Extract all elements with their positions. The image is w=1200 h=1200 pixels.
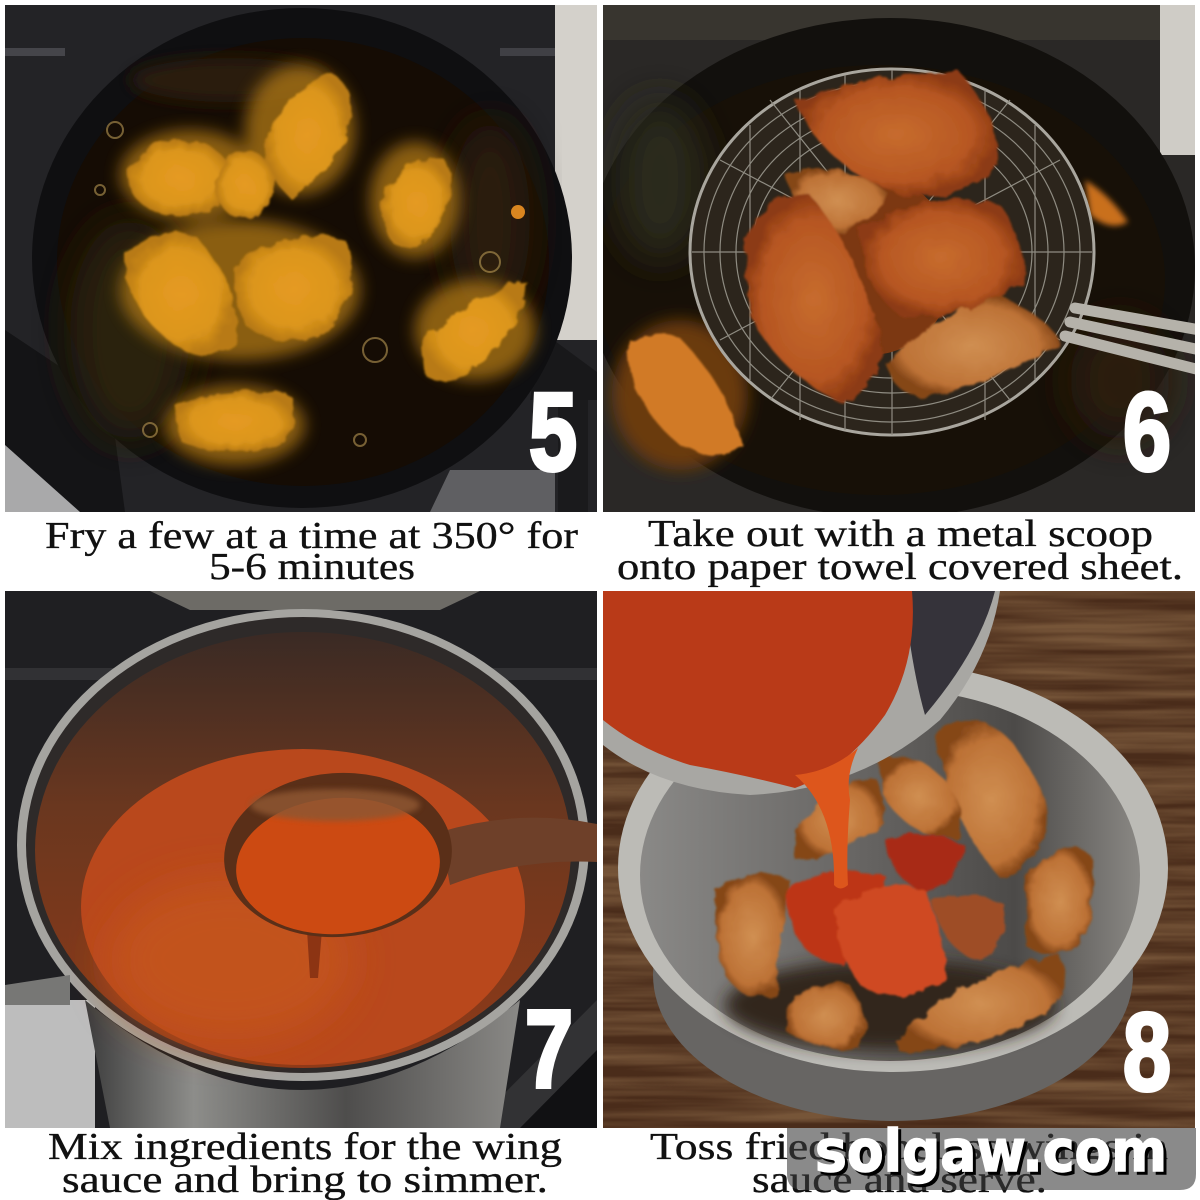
scoop handle [1065, 308, 1200, 370]
caption: step 7: Mix ingredients for the wing [48, 1126, 562, 1168]
steel bowl [653, 968, 1133, 1121]
caption: step 6 [617, 513, 1183, 588]
pot body [85, 1000, 520, 1128]
caption: step 5 [45, 515, 578, 588]
caption: step 8: Toss fried boneless wings in [650, 1126, 1168, 1168]
oil bubbles [95, 122, 500, 446]
wooden spoon [219, 765, 597, 945]
step number 6: 6 [1123, 371, 1171, 494]
pot interior [35, 632, 571, 1068]
sauced wings [785, 834, 965, 996]
watermark bar [787, 1128, 1196, 1190]
skillet with oil [585, 18, 1195, 518]
fried chicken pieces on scoop [745, 72, 1058, 405]
caption: step 6: onto paper towel covered sheet. [617, 546, 1183, 588]
caption: step 7: sauce and bring to simmer. [62, 1159, 548, 1200]
sauce surface [81, 749, 525, 1065]
caption: step 7 [48, 1126, 562, 1200]
watermark text: solgaw.com [815, 1117, 1167, 1185]
caption: step 6: Take out with a metal scoop [648, 513, 1153, 555]
panel: step 8 tossing photo [603, 591, 1195, 1128]
red wing sauce [603, 591, 913, 888]
step number 5: 5 [529, 371, 577, 494]
sauce drip [307, 935, 322, 978]
frying chicken pieces [125, 72, 525, 451]
fried wings in bowl [714, 721, 1093, 1052]
panel: step 6 scoop photo [585, 5, 1200, 518]
bubbling halos [120, 65, 535, 465]
watermark text: solgaw.com [818, 1120, 1170, 1188]
step number 7: 7 [525, 988, 573, 1111]
skillet [32, 8, 572, 508]
caption: step 5: Fry a few at a time at 350° for [45, 515, 578, 557]
frying piece in oil [612, 320, 748, 470]
pouring bowl [603, 591, 1000, 795]
step number 8: 8 [1123, 991, 1171, 1114]
caption: step 8: sauce and serve. [752, 1159, 1047, 1200]
panel: step 5 frying photo [5, 5, 597, 512]
caption: step 8 [650, 1126, 1168, 1200]
metal scoop [690, 69, 1094, 435]
pot handle [5, 975, 70, 1005]
pot rim [17, 609, 589, 1081]
panel: step 7 sauce photo [5, 591, 597, 1128]
hot oil [57, 38, 549, 486]
caption: step 5: 5-6 minutes [209, 546, 415, 588]
